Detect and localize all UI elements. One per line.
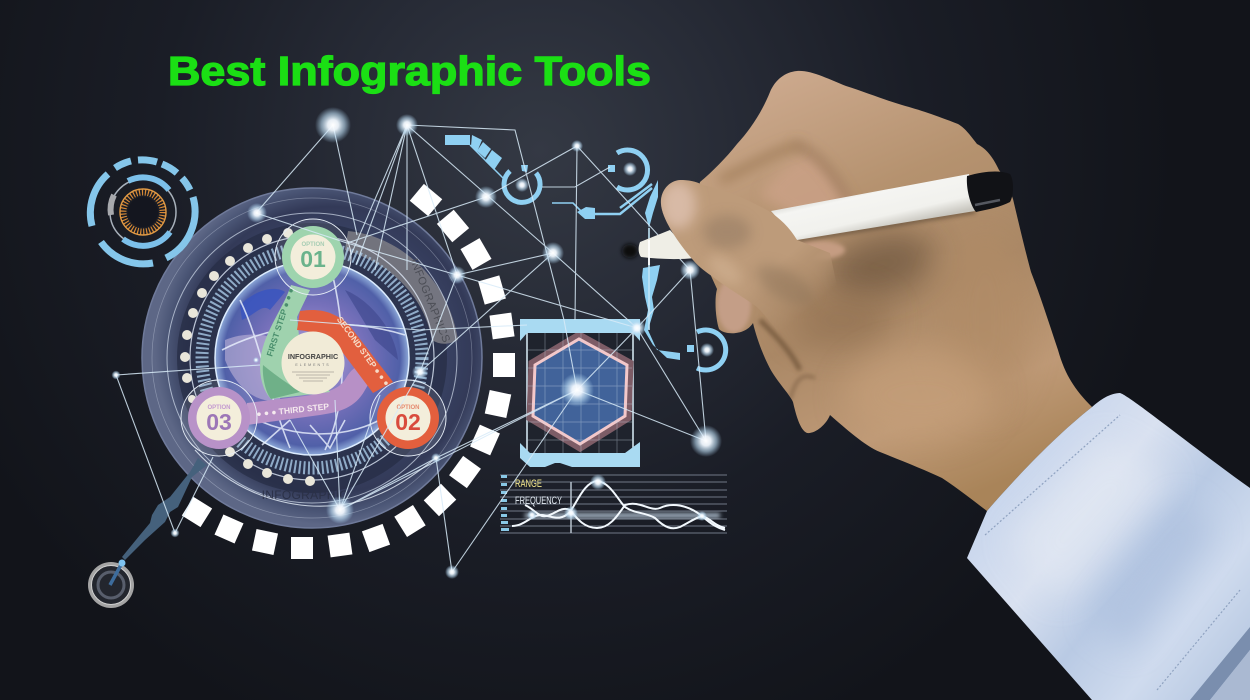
hand shading [716, 138, 1021, 401]
grid frame [527, 330, 633, 457]
icon: pointer and dial bottom left [88, 458, 207, 608]
globe [215, 261, 409, 455]
pen cap highlight [975, 200, 1000, 205]
hand holding a pen [622, 71, 1092, 511]
faded curved label right: INFOGRAPHICS [407, 257, 452, 345]
cuff stitching [985, 415, 1240, 690]
purple arm: third step [247, 366, 370, 425]
globe map patches and meridians [222, 265, 405, 450]
step labels [256, 287, 392, 419]
connector shape upper [552, 203, 583, 213]
centre label: INFOGRAPHIC [288, 352, 338, 361]
white square ring [182, 184, 515, 559]
centre circle [282, 332, 344, 394]
dots ring [180, 228, 315, 486]
range label: RANGE [515, 478, 542, 490]
connector stem [648, 228, 650, 330]
step labels: FIRST STEP ● ● ● [264, 287, 296, 358]
icon: circular gauge top left [90, 160, 195, 264]
faded label bottom: INFOGRAPHIC [262, 488, 348, 502]
option 01: OPTION [301, 242, 325, 248]
top frame bar [520, 319, 640, 341]
bar and squares [445, 135, 505, 180]
orange tick ring [123, 192, 163, 232]
title: Best Infographic Tools [168, 48, 651, 94]
grey shadow arc on sphere [345, 231, 458, 344]
frequency label: FREQUENCY [515, 495, 562, 507]
dark inner disc [177, 223, 447, 493]
green arm shadow [263, 365, 300, 399]
option 01 [275, 219, 351, 295]
connector shape lower [642, 265, 680, 360]
panel: hexagon scanner [520, 319, 640, 467]
wave nodes [527, 474, 707, 521]
thumb [661, 180, 840, 350]
tick marks [501, 475, 509, 531]
network nodes [112, 107, 722, 579]
step labels: SECOND STEP ● ● ● [335, 315, 392, 388]
bottom frame bar [520, 442, 640, 467]
thumb shading [660, 180, 810, 304]
thin glass rings [152, 198, 472, 518]
bright band [525, 513, 720, 518]
option 03 [181, 380, 257, 456]
option 03: 03 [206, 409, 232, 435]
glass sphere [142, 188, 482, 528]
cuff fold shadow [1010, 440, 1170, 600]
cuff body [967, 393, 1250, 700]
hatch ring [202, 248, 422, 468]
waves [512, 481, 725, 530]
hud connectors [445, 135, 680, 360]
pen tip ink [622, 244, 638, 258]
centre circle: ELEMENTS [295, 363, 331, 367]
hud line over pen [648, 240, 650, 265]
chart rules [500, 475, 727, 533]
hand base [690, 71, 1092, 511]
network lines [116, 125, 706, 572]
pen body [771, 174, 975, 240]
option 02: 02 [395, 409, 421, 435]
option 01: 01 [300, 246, 326, 272]
step labels: ● ● ● THIRD STEP [256, 401, 330, 419]
option 03: OPTION [207, 405, 231, 411]
frequency chart [500, 474, 727, 533]
thin arc across sphere [195, 450, 436, 506]
pen front [639, 230, 695, 259]
pen cap [967, 172, 1013, 212]
red arm: second step [297, 310, 393, 393]
marker line [570, 482, 572, 533]
outer blue arcs [90, 160, 195, 264]
green arm: first step [260, 285, 330, 399]
option 02 [370, 380, 446, 456]
grid lines [528, 332, 632, 455]
panel: globe infographic [142, 188, 482, 528]
inner grey and blue ring [110, 179, 176, 245]
hud rings [504, 150, 726, 370]
option 02: OPTION [396, 405, 420, 411]
shirt cuff [967, 393, 1250, 700]
hexagon [530, 335, 630, 448]
sleeve shadow [1190, 627, 1250, 700]
